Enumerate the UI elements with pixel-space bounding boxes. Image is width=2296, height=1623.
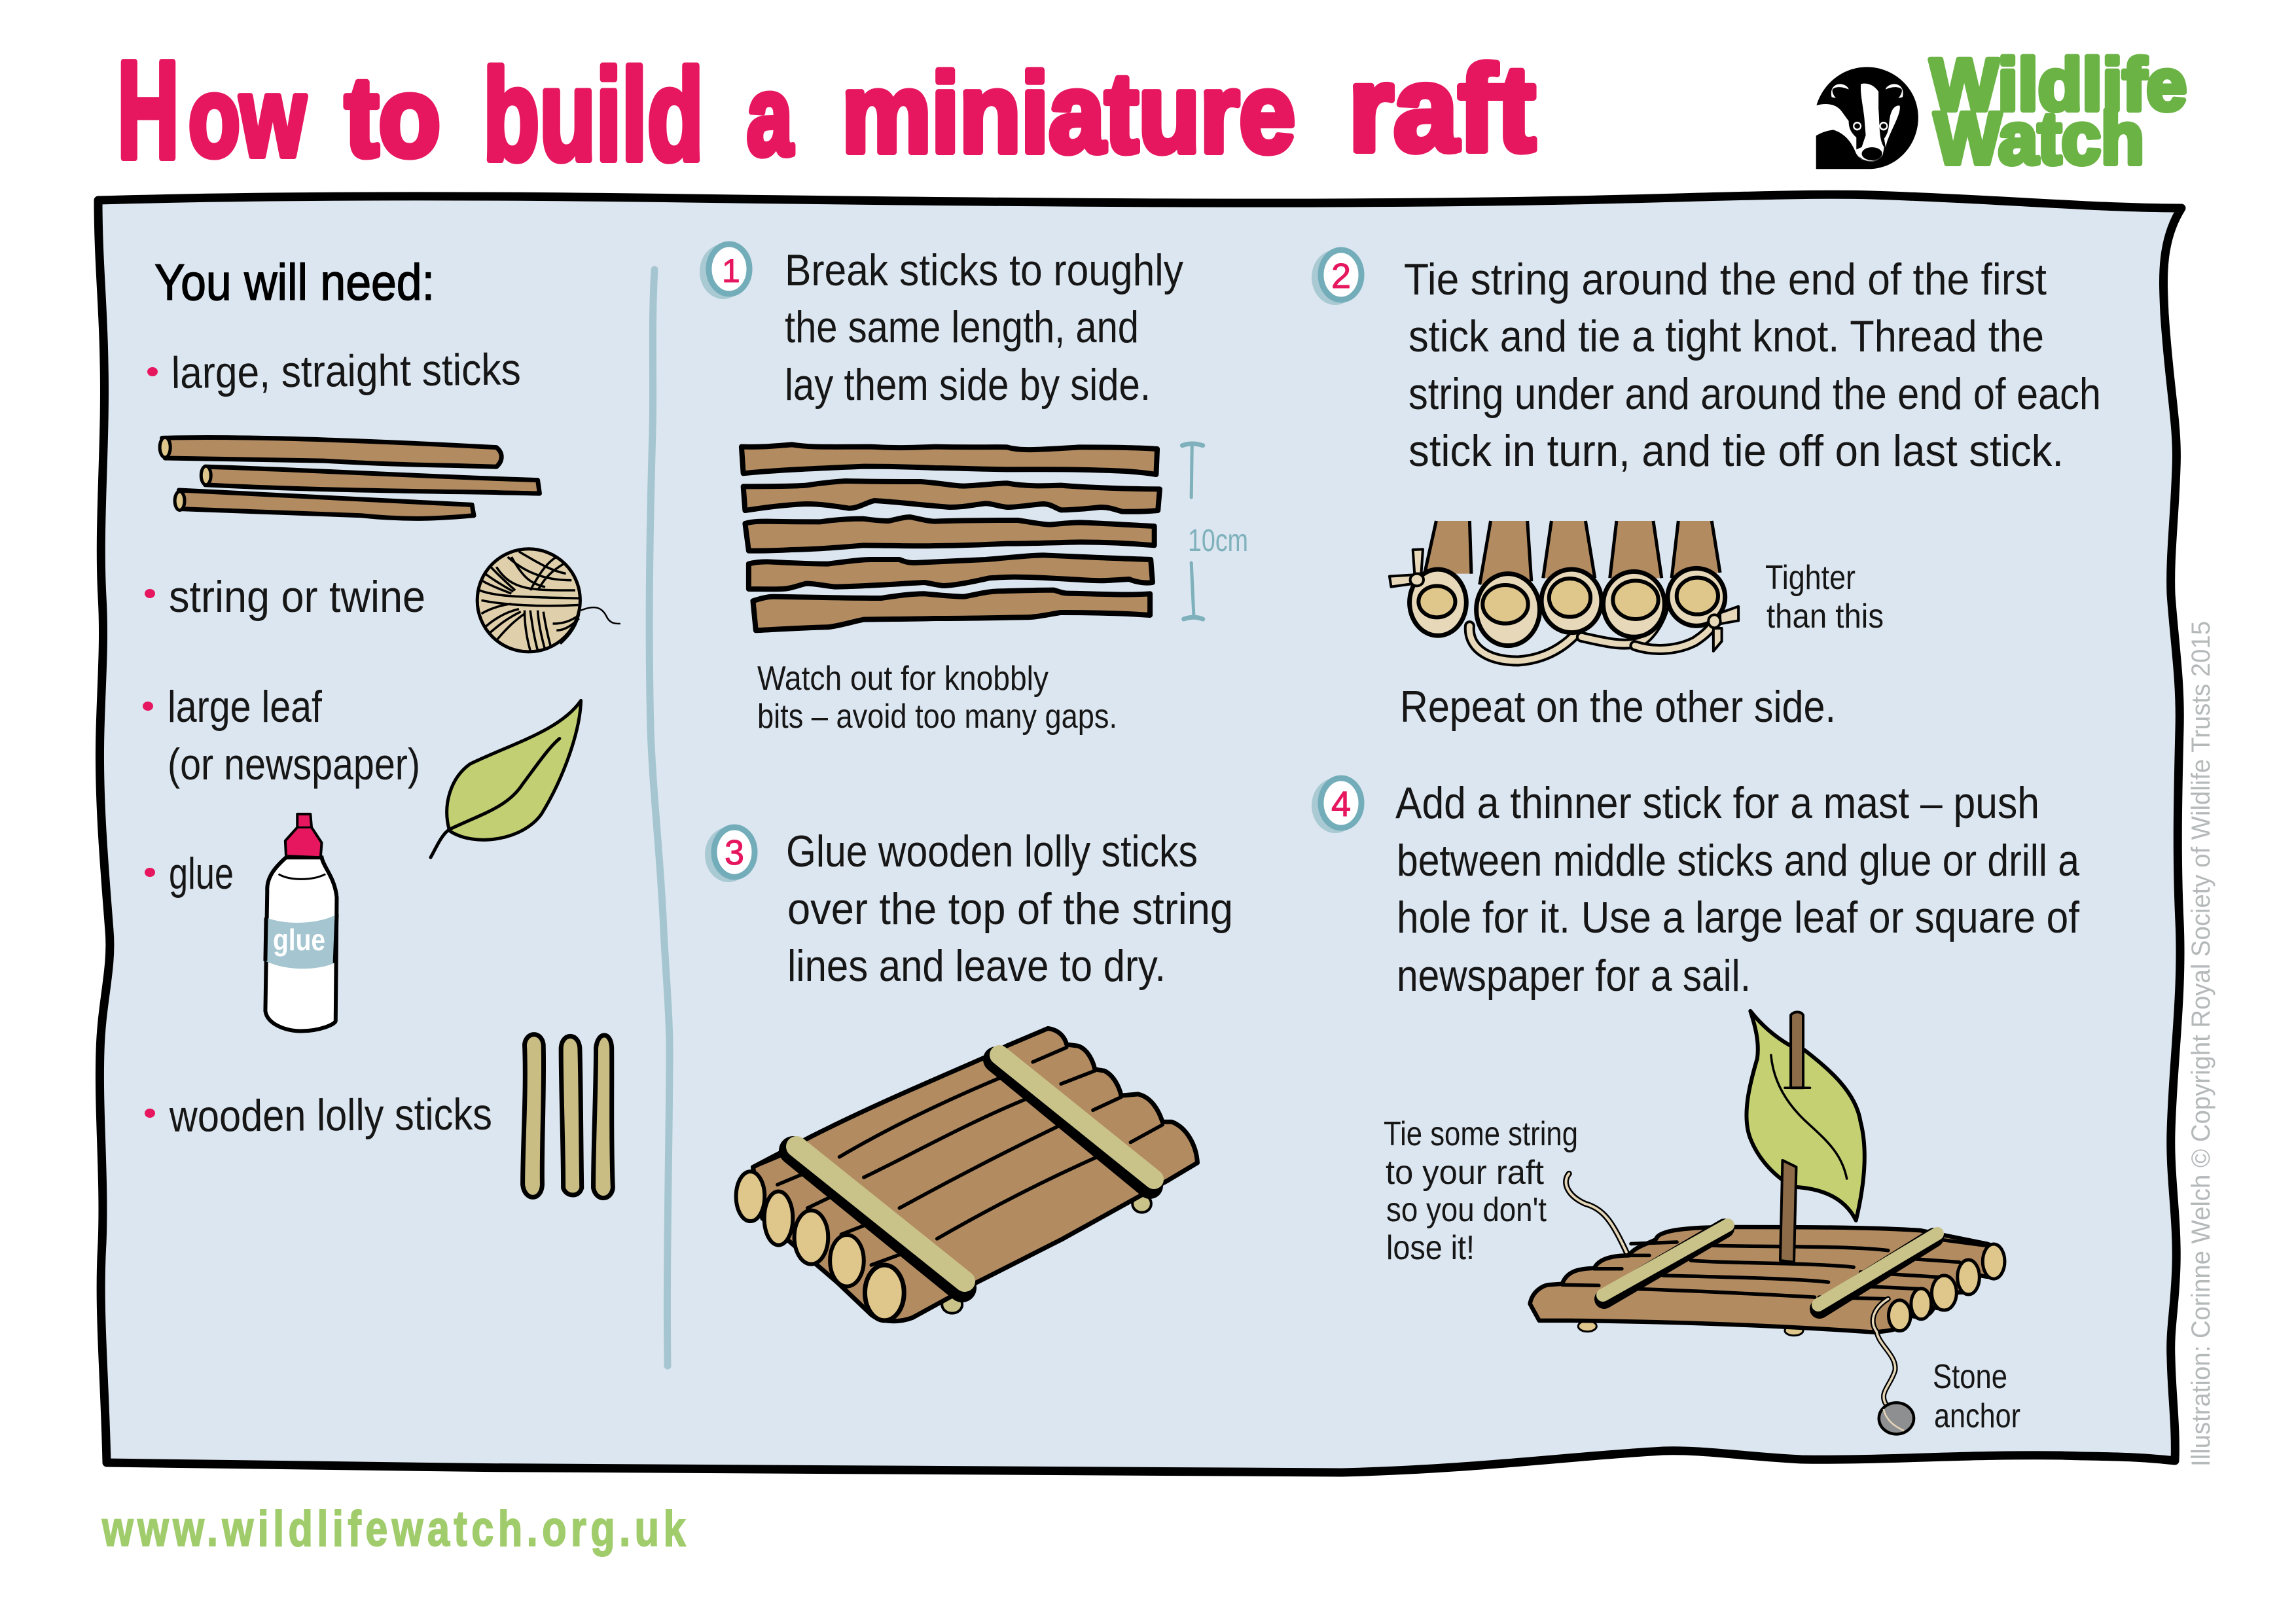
- measure: 10cm bracket: 10cm: [1188, 524, 1248, 558]
- illustration: finished raft with sail and anchor: [1530, 1011, 2005, 1434]
- step 3 text: Glue wooden lolly sticks: [786, 827, 1198, 876]
- title: miniature: [842, 50, 1295, 176]
- step 2 text: Tie string around the end of the first: [1404, 255, 2047, 304]
- logo: wordmark: [1930, 44, 2187, 179]
- icon: glue bottle: [265, 814, 336, 1031]
- note: tighter than this: [1765, 559, 1884, 635]
- step 1 text: the same length, and: [785, 302, 1139, 352]
- note: tie some string: Tie some string: [1384, 1115, 1578, 1153]
- step number 2: [1312, 250, 1361, 305]
- illustration: string tied around stick ends: [1390, 521, 1738, 661]
- note: tighter than this: than this: [1767, 597, 1884, 635]
- icon: three sticks: [160, 437, 539, 518]
- step number 3: [705, 827, 755, 882]
- note: stone anchor: anchor: [1934, 1397, 2020, 1435]
- measure: 10cm bracket: [1182, 444, 1248, 619]
- icon: leaf: [431, 700, 581, 857]
- note: tie some string: [1384, 1115, 1578, 1267]
- step 4 text: hole for it. Use a large leaf or square of: [1397, 893, 2079, 942]
- title: ow: [188, 54, 306, 180]
- step 1 text: lay them side by side.: [785, 360, 1151, 410]
- note: stone anchor: Stone: [1933, 1358, 2007, 1396]
- step 3 text: [786, 827, 1233, 991]
- note: tie some string: lose it!: [1386, 1229, 1475, 1267]
- item: large leaf or newspaper: (or newspaper): [168, 740, 420, 789]
- item: large leaf or newspaper: large leaf: [168, 682, 322, 732]
- step 2 text: stick and tie a tight knot. Thread the: [1408, 312, 2044, 361]
- step number 2: 2: [1331, 257, 1351, 296]
- title: to: [345, 54, 440, 180]
- website url: www.wildlifewatch.org.uk: [101, 1501, 690, 1557]
- copyright: Illustration: Corinne Welch © Copyright Royal Society of Wildlife Trusts 2015: [2187, 621, 2215, 1467]
- step number 3: 3: [725, 833, 744, 872]
- title: H: [117, 32, 179, 187]
- panel: main background: [98, 194, 2181, 1472]
- step 2 text: string under and around the end of each: [1408, 369, 2101, 419]
- note: tie some string: so you don't: [1386, 1191, 1547, 1229]
- step 1 text: Break sticks to roughly: [785, 245, 1183, 295]
- text: repeat on the other side: Repeat on the other side.: [1400, 682, 1836, 732]
- heading: you will need: You will need:: [154, 253, 435, 311]
- illustration: raft with lolly sticks: [736, 1028, 1197, 1321]
- step number 1: 1: [722, 253, 740, 289]
- logo: badger: [1815, 67, 1918, 169]
- title: a: [747, 53, 793, 179]
- step 4 text: between middle sticks and glue or drill a: [1397, 836, 2079, 885]
- step 2 text: [1404, 255, 2101, 476]
- step 4 text: Add a thinner stick for a mast – push: [1395, 778, 2039, 828]
- logo: wordmark: Wildlife: [1930, 44, 2187, 126]
- step 4 text: newspaper for a sail.: [1397, 951, 1751, 1001]
- item: large leaf or newspaper: [143, 682, 420, 789]
- title: [117, 32, 1535, 187]
- step 3 text: over the top of the string: [787, 884, 1233, 934]
- step number 1: [700, 244, 749, 299]
- note: stone anchor: [1933, 1358, 2020, 1435]
- item: wooden lolly sticks: wooden lolly sticks: [169, 1090, 492, 1141]
- icon: three lolly sticks: [523, 1035, 613, 1198]
- step number 4: 4: [1331, 785, 1351, 824]
- item: glue: [145, 849, 234, 899]
- panel: you will need: [143, 253, 620, 1198]
- note: knobbly bits: [757, 660, 1117, 736]
- icon: ball of string: [477, 549, 620, 652]
- logo: wordmark: Watch: [1934, 98, 2144, 179]
- item: string or twine: string or twine: [169, 572, 425, 622]
- note: knobbly bits: bits – avoid too many gaps.: [757, 698, 1117, 736]
- illustration: five sticks side by side: [742, 444, 1160, 630]
- title: raft: [1348, 41, 1535, 177]
- note: knobbly bits: Watch out for knobbly: [757, 660, 1049, 698]
- item: glue: glue: [169, 849, 234, 899]
- step number 4: [1312, 778, 1361, 833]
- step 1 text: [785, 245, 1183, 410]
- title: build: [483, 43, 704, 187]
- step 3 text: lines and leave to dry.: [787, 941, 1166, 991]
- divider: [649, 270, 670, 1366]
- step 4 text: [1395, 778, 2079, 1001]
- note: tighter than this: Tighter: [1765, 559, 1856, 597]
- step 2 text: stick in turn, and tie off on last stick.: [1408, 426, 2064, 476]
- icon: glue bottle: glue: [273, 923, 325, 957]
- note: tie some string: to your raft: [1386, 1154, 1545, 1192]
- item: large, straight sticks: large, straight sticks: [171, 344, 521, 398]
